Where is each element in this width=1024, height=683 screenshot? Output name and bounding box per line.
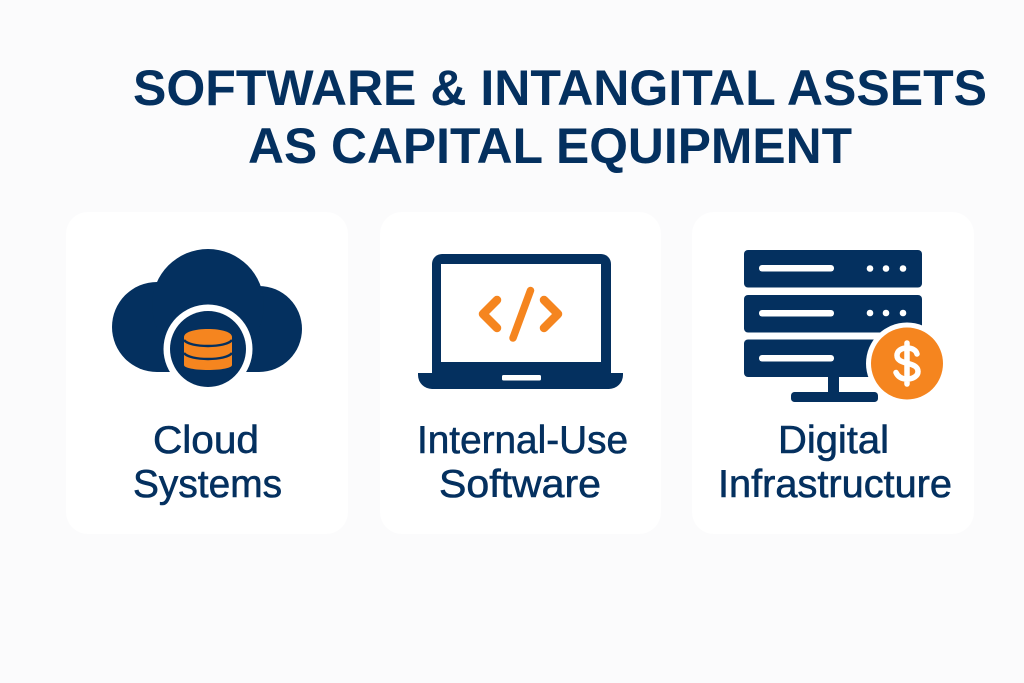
label: internal-use software [417, 419, 628, 506]
title: AS CAPITAL EQUIPMENT [248, 118, 852, 174]
title: SOFTWARE & INTANGITAL ASSETS [133, 60, 987, 116]
label: digital infrastructure [718, 419, 952, 506]
icon: cloud with database [112, 249, 302, 394]
title [133, 60, 987, 174]
label: cloud systems [133, 419, 282, 506]
label: cloud systems: Systems [133, 463, 282, 506]
icon: laptop with code [418, 254, 623, 389]
panel: internal-use software [380, 212, 661, 534]
label: internal-use software: Internal-Use [417, 419, 628, 462]
label: digital infrastructure: Infrastructure [718, 463, 952, 506]
label: digital infrastructure: Digital [778, 419, 889, 462]
label: cloud systems: Cloud [153, 419, 259, 462]
label: internal-use software: Software [439, 463, 601, 506]
panel: cloud systems [66, 212, 348, 534]
panel: digital infrastructure [692, 212, 974, 534]
icon: server with dollar coin [744, 250, 948, 404]
